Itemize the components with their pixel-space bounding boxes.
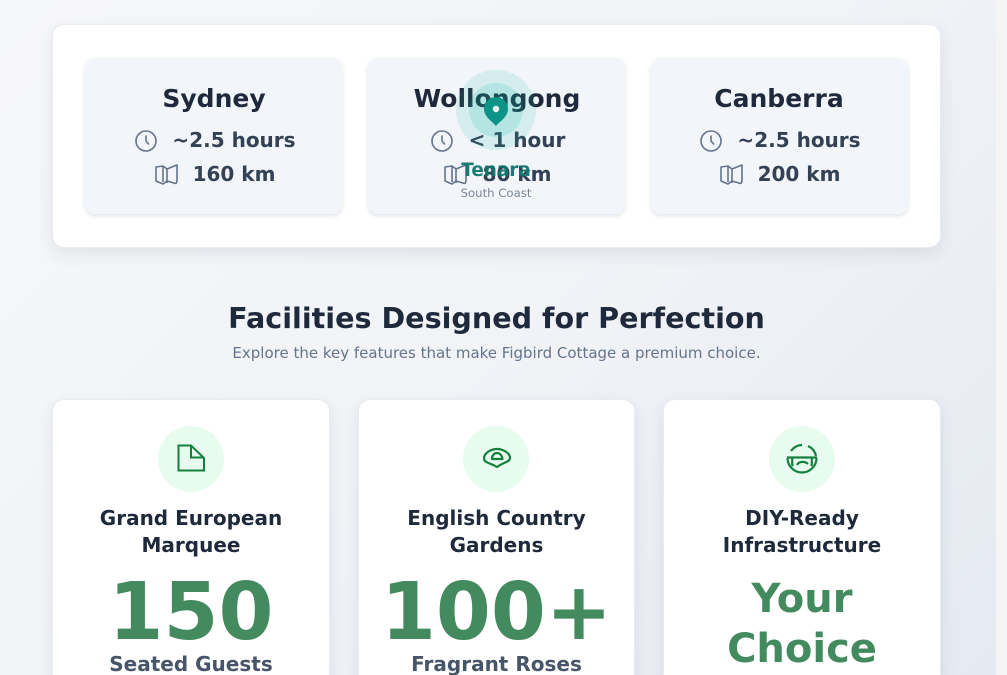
icon background: marquee [158,426,224,492]
panel: English Country Gardens [358,399,635,675]
icon: map Canberra [720,164,743,185]
card: Sydney [85,58,342,214]
feature title: English Country Gardens: English Country [407,506,586,530]
stat: 150: 150 [109,566,273,658]
icon: clock Canberra [700,130,722,152]
distance: Canberra: 200 km [758,162,840,186]
icon: clock Wollongong [431,130,453,152]
icon: map Wollongong [444,165,467,185]
feature title: DIY-Ready Infrastructure [723,506,881,557]
heading: facilities: Facilities Designed for Perfection [228,301,765,335]
panel: Grand European Marquee [52,399,330,675]
feature title: DIY-Ready Infrastructure: Infrastructure [723,533,881,557]
feature title: English Country Gardens: Gardens [450,533,543,557]
city name: Sydney: Sydney [162,84,266,113]
icon: eye [482,448,512,468]
panel: DIY-Ready Infrastructure [663,399,941,675]
city name: Canberra: Canberra [714,84,844,113]
feature title: Grand European Marquee [100,506,282,557]
stat: 100+: 100+ [381,566,612,658]
marker label: Tenara: Tenara [461,160,531,181]
icon: globe [786,444,818,474]
city name: Wollongong: Wollongong [414,84,580,113]
icon background: gardens [463,426,529,492]
subheading: facilities: Explore the key features that make Figbird Cottage a premium choice. [232,344,761,362]
travel time: Wollongong: < 1 hour [469,128,565,152]
feature title: DIY-Ready Infrastructure: DIY-Ready [745,506,859,530]
icon: document [178,444,205,472]
travel time: Sydney: ~2.5 hours [172,128,296,152]
travel time: Canberra: ~2.5 hours [737,128,861,152]
feature title: English Country Gardens [407,506,586,557]
marker sublabel: South Coast: South Coast [461,186,531,200]
stat: Your Choice: Your [752,576,852,622]
stat: Your Choice [727,576,877,672]
icon: map Sydney [155,164,178,185]
icon background: infrastructure [768,426,834,492]
feature title: Grand European Marquee: Grand European [100,506,282,530]
distance: Sydney: 160 km [193,162,275,186]
icon: clock Sydney [135,130,157,152]
panel: travel distances [52,24,941,248]
card: Canberra [651,58,908,214]
distance: Wollongong: 80 km [483,162,551,186]
map marker: Tenara [456,70,536,150]
stat: Your Choice: Choice [727,626,877,672]
card: Wollongong [368,58,625,214]
feature title: Grand European Marquee: Marquee [142,533,240,557]
